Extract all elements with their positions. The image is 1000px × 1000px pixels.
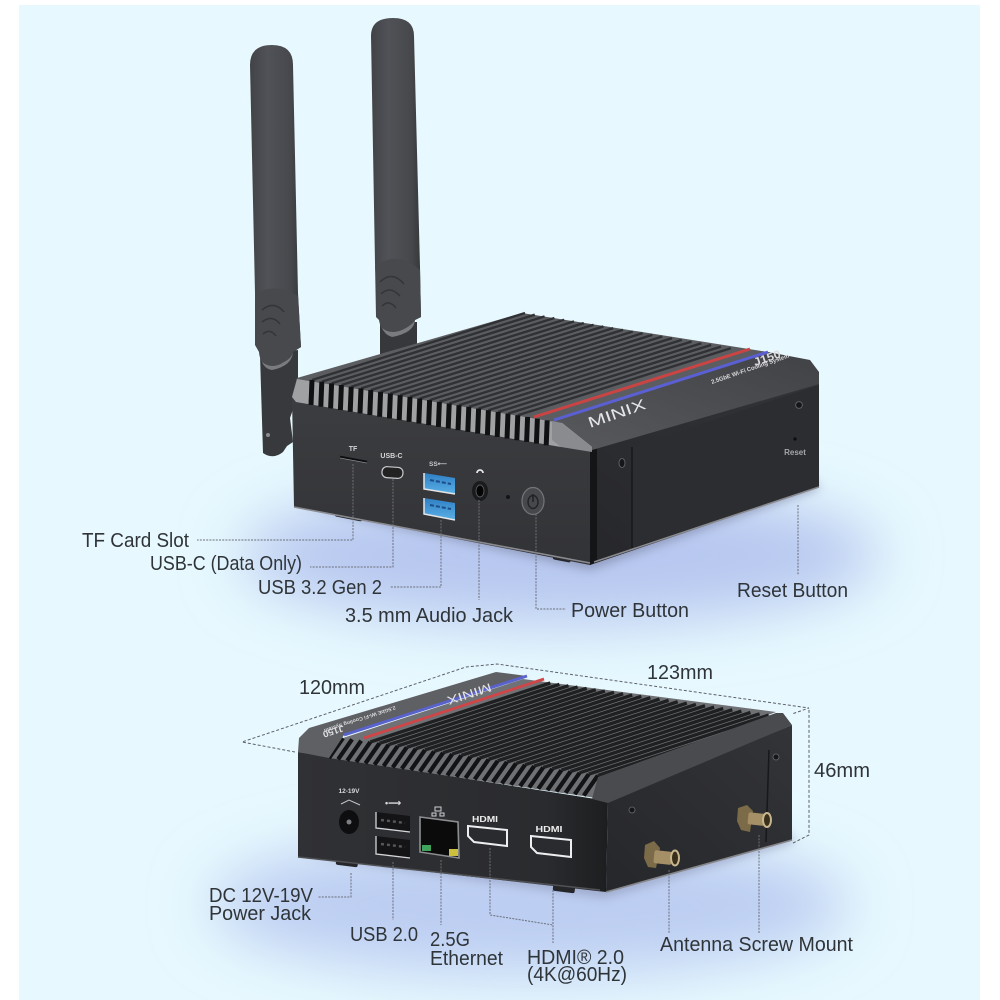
dimension labels xyxy=(299,662,870,782)
power button xyxy=(522,488,544,514)
antenna: right xyxy=(371,18,421,358)
USB 2.0 ports: •⟶ xyxy=(385,798,401,808)
TF card slot xyxy=(340,446,367,463)
leader lines: front ports xyxy=(197,464,798,609)
case screws xyxy=(619,402,802,468)
HDMI port 1 xyxy=(468,815,507,846)
indicator LED xyxy=(506,495,510,499)
device: front view mini PC xyxy=(292,313,819,565)
blue and red stripes xyxy=(344,676,544,738)
brand logo on lid: MINIX xyxy=(445,680,493,708)
rear device solid plates xyxy=(298,672,527,758)
USB 3.2 ports: SS⟵ xyxy=(429,461,448,468)
rear device side face xyxy=(606,725,792,892)
HDMI port 2: HDMI xyxy=(536,825,562,834)
top device finned lid xyxy=(292,313,768,447)
dimension lines xyxy=(242,664,809,843)
2.5G ethernet port xyxy=(420,807,459,858)
HDMI port 1: HDMI xyxy=(472,815,498,824)
dimension labels: 46mm xyxy=(814,760,870,782)
labels: rear ports: USB 2.0 xyxy=(350,924,418,946)
labels: rear ports: DC 12V-19V xyxy=(209,885,314,907)
top device front face xyxy=(292,397,592,565)
labels: rear ports xyxy=(209,885,853,986)
antenna: left xyxy=(250,45,301,456)
labels: rear ports: Power Jack xyxy=(209,903,312,925)
TF card slot: TF xyxy=(349,446,358,453)
DC power jack: 12-19V xyxy=(339,788,360,795)
labels: front ports: TF Card Slot xyxy=(82,530,189,552)
antenna connector 1 xyxy=(644,841,679,868)
antenna connector 2 xyxy=(737,805,771,832)
labels: front ports: Reset Button xyxy=(737,580,848,602)
labels: rear ports: Ethernet xyxy=(430,948,503,970)
brand logo on lid: MINIX xyxy=(586,396,648,432)
DC power jack xyxy=(339,788,360,834)
dimension labels: 120mm xyxy=(299,677,365,699)
USB 2.0 ports xyxy=(376,798,410,858)
labels: front ports: 3.5 mm Audio Jack xyxy=(345,605,514,627)
HDMI port 2 xyxy=(531,825,571,857)
reset pinhole: Reset xyxy=(784,448,806,457)
labels: front ports xyxy=(82,530,848,627)
labels: rear ports: 2.5G xyxy=(430,929,470,951)
device: rear view mini PC xyxy=(298,672,792,893)
USB-C port xyxy=(380,453,403,479)
leader lines: rear ports xyxy=(318,835,759,943)
top device feet xyxy=(334,509,571,563)
labels: front ports: USB-C (Data Only) xyxy=(150,553,302,575)
labels: front ports: USB 3.2 Gen 2 xyxy=(258,577,382,599)
reset pinhole xyxy=(784,437,806,457)
labels: rear ports: (4K@60Hz) xyxy=(527,964,627,986)
top device side face xyxy=(590,378,819,565)
model text on lid: 2.5GbE Wi-Fi Cooling System xyxy=(322,704,396,733)
labels: front ports: Power Button xyxy=(571,600,689,622)
USB 3.2 ports xyxy=(424,461,455,520)
model text on lid: 2.5GbE Wi-Fi Cooling System xyxy=(711,354,790,386)
side screws xyxy=(629,754,779,813)
rear device finned lid xyxy=(329,679,776,798)
rear device front face xyxy=(298,752,608,892)
model text on lid: J150 xyxy=(321,723,345,739)
top device solid plate xyxy=(555,352,819,450)
model text on lid: J150 xyxy=(752,348,782,369)
rear device feet xyxy=(336,857,575,893)
labels: rear ports: HDMI® 2.0 xyxy=(527,947,624,969)
USB-C port: USB-C xyxy=(380,453,403,460)
red and blue stripes xyxy=(534,349,768,420)
audio jack xyxy=(472,470,488,501)
dimension labels: 123mm xyxy=(647,662,713,684)
labels: rear ports: Antenna Screw Mount xyxy=(660,934,853,956)
